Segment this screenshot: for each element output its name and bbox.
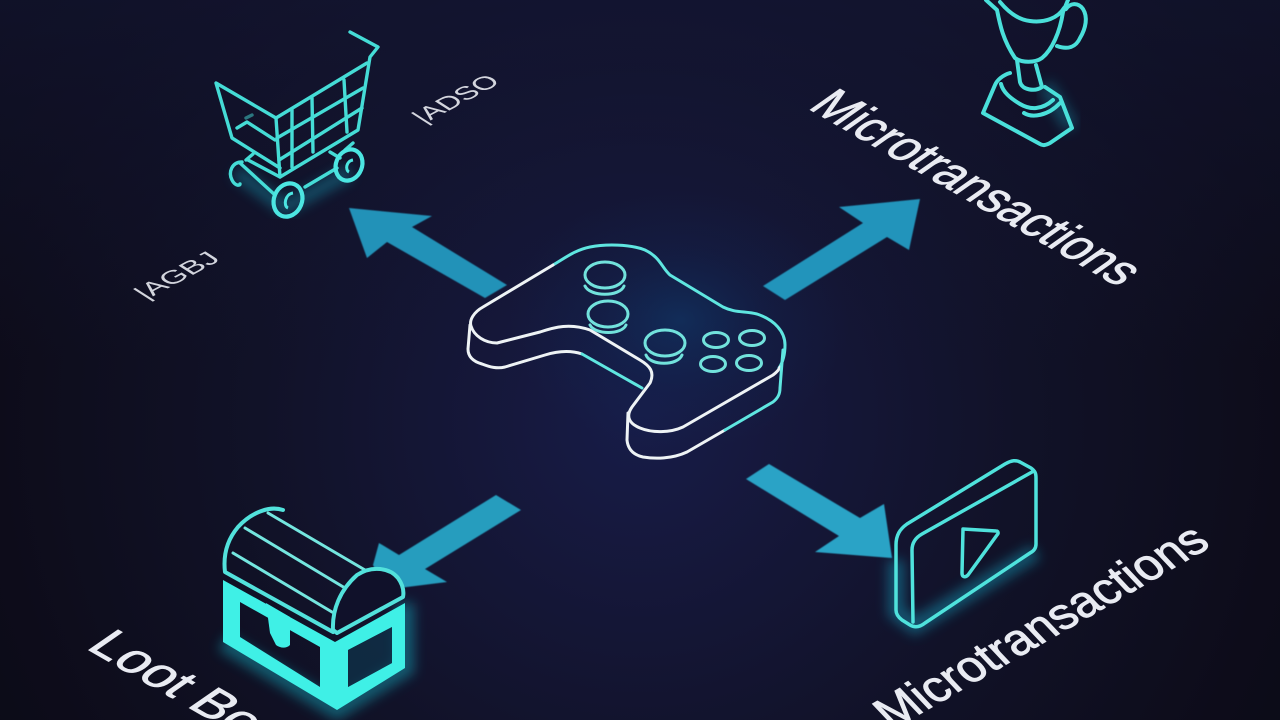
tile outline [896,461,1036,627]
chest lid [225,509,365,632]
cart rear wheel [331,145,367,185]
label: small lower tag: |AGBJ [127,247,226,303]
icon: game controller [468,245,785,458]
trophy stem [1017,60,1042,90]
chest base [223,580,405,710]
label: top right Microtransactions: Microtransactions [798,81,1157,294]
arrow: to video tile [746,464,892,558]
trophy base [983,73,1072,145]
controller body white left edge [471,265,780,432]
trophy glow [1045,85,1072,128]
arrow: to trophy [763,199,920,300]
controller lower right edge [627,413,725,458]
controller lower cyan edge [582,354,642,388]
icon: trophy [983,0,1086,145]
cart glow [236,172,350,208]
icon: loot chest [223,509,405,710]
cart front wheel [269,179,307,221]
trophy handle [1057,4,1086,48]
label: small upper tag: |ADSO [405,70,506,127]
controller lower left edge [468,325,582,368]
left thumbstick [585,262,625,294]
chest latch [266,603,290,648]
chest glow [223,603,405,710]
icon: video play tile [896,461,1036,627]
chest holes tint [348,627,392,687]
arrow: to shopping cart [349,208,507,298]
play triangle [962,529,998,577]
icon: shopping cart [216,32,378,221]
tile glow [896,552,1036,626]
controller body cyan top edge [553,245,785,368]
arrow: to loot chest [373,495,521,590]
right thumbstick [645,330,685,363]
middle thumbstick [588,301,628,332]
trophy cup [986,0,1068,62]
chest end cap [333,569,403,633]
face buttons [700,330,764,372]
cart outline [216,32,378,195]
